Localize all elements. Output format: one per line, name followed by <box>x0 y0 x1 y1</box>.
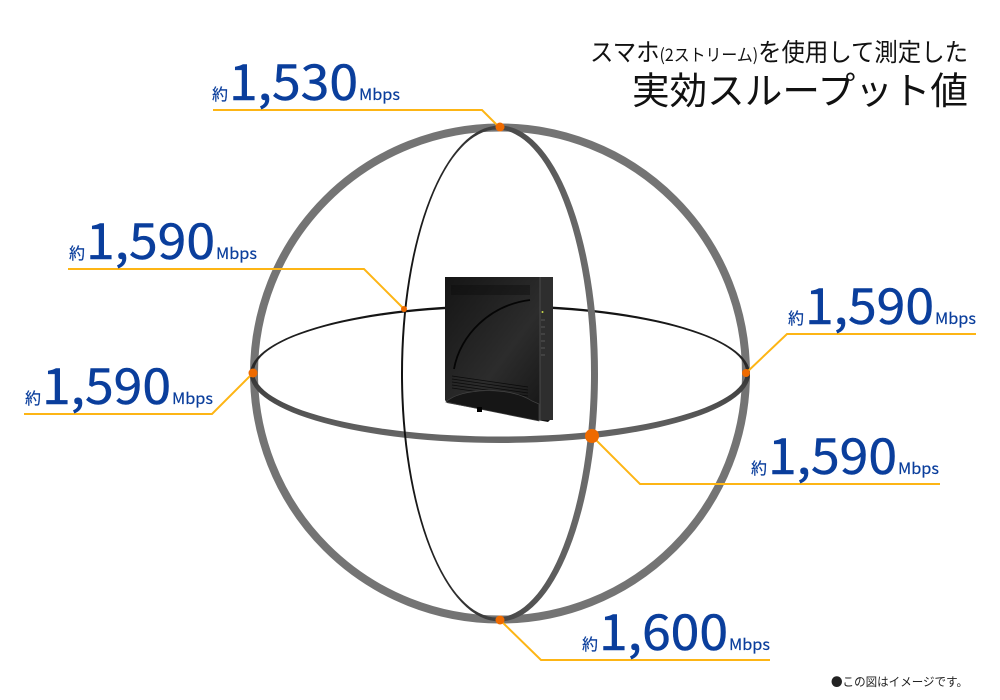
label: bottom 1,600 Mbps: 1,600 <box>599 594 728 664</box>
label: bottom 1,600 Mbps: 約 <box>582 631 598 655</box>
heading: スマホ(2ストリーム)を使用して測定した <box>590 33 968 69</box>
label: top 1,530 Mbps <box>212 44 400 114</box>
measurement points <box>248 122 750 624</box>
label: lower right 1,590 Mbps: 1,590 <box>768 418 897 488</box>
heading: 実効スループット値 <box>632 60 968 115</box>
label: top 1,530 Mbps: 1,530 <box>229 44 358 114</box>
label: right 1,590 Mbps: 1,590 <box>805 268 934 338</box>
label: right 1,590 Mbps <box>788 268 976 338</box>
sphere outer ring <box>254 128 746 620</box>
label: lower right 1,590 Mbps <box>751 418 939 488</box>
label: bottom 1,600 Mbps: Mbps <box>729 633 770 655</box>
label: left 1,590 Mbps: Mbps <box>172 387 213 409</box>
sphere horizontal ring <box>250 305 750 443</box>
footnote: ●この図はイメージです。 <box>831 673 968 690</box>
label: lower right 1,590 Mbps: 約 <box>751 455 767 479</box>
label: top 1,530 Mbps: 約 <box>212 81 228 105</box>
label: upper left 1,590 Mbps: Mbps <box>216 242 257 264</box>
label: left 1,590 Mbps: 約 <box>25 385 41 409</box>
label: upper left 1,590 Mbps: 1,590 <box>86 203 215 273</box>
heading <box>590 33 968 115</box>
sphere vertical ring <box>401 125 598 621</box>
label: right 1,590 Mbps: Mbps <box>935 307 976 329</box>
router <box>445 277 553 422</box>
leader lines <box>24 110 976 660</box>
label: lower right 1,590 Mbps: Mbps <box>898 457 939 479</box>
label: bottom 1,600 Mbps <box>582 594 770 664</box>
label: upper left 1,590 Mbps: 約 <box>69 240 85 264</box>
label: left 1,590 Mbps <box>25 348 213 418</box>
label: right 1,590 Mbps: 約 <box>788 305 804 329</box>
label: upper left 1,590 Mbps <box>69 203 257 273</box>
label: left 1,590 Mbps: 1,590 <box>42 348 171 418</box>
label: top 1,530 Mbps: Mbps <box>359 83 400 105</box>
